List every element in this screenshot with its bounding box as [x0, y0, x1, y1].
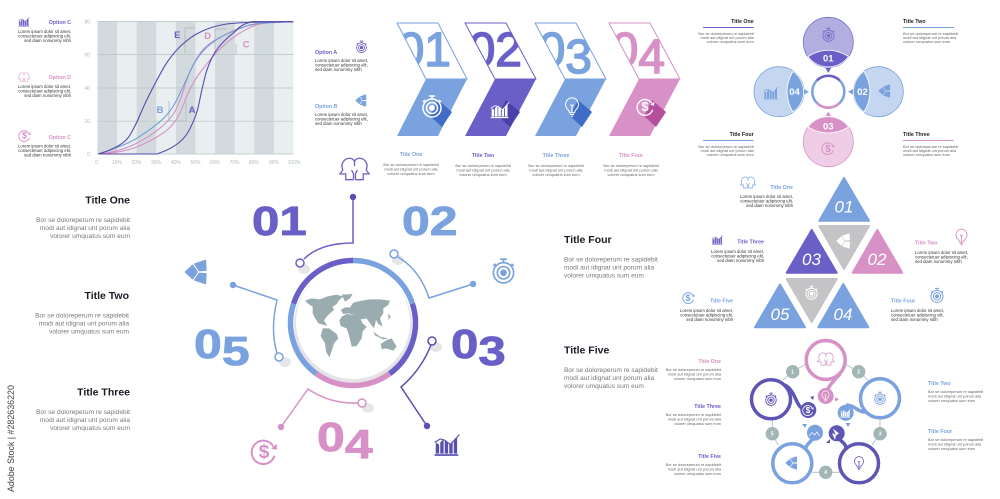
stock stamp: Adobe Stock | #282636220	[6, 385, 16, 492]
right text blocks: volorer umquatus sum eum	[564, 383, 644, 390]
circle 01	[803, 17, 853, 73]
right labels: Title Two	[928, 381, 951, 387]
chevron 01: Title One	[400, 152, 422, 158]
x axis labels: 80%	[249, 160, 260, 166]
right labels: volorer umquatus sum eum	[928, 398, 975, 403]
title three: consectetuer adipiscing elit,	[711, 254, 764, 258]
chevron 02	[455, 23, 536, 177]
title five: Title Five	[710, 298, 733, 304]
chevron 03	[528, 23, 606, 177]
y axis labels: 20	[84, 119, 90, 125]
left text blocks: Bor se doloreperum re sapidebit	[36, 409, 130, 416]
chevron 02: Bor se doloreperum re sapidebit	[455, 163, 512, 168]
option C dollar: consectetuer adipiscing elit,	[18, 148, 71, 153]
connector 04	[278, 389, 374, 430]
title three: modi aut idignat unt porum alia	[903, 148, 957, 153]
chart plot: C	[243, 40, 250, 50]
icon: heads	[340, 158, 369, 180]
option A: Lorem ipsum dolor sit amet,	[315, 58, 368, 63]
triangle numbers: 03	[802, 250, 821, 269]
big numbers: 01	[252, 198, 307, 244]
panel: S-curve chart	[18, 17, 301, 166]
world map	[305, 294, 397, 357]
left text blocks: Bor se doloreperum re sapidebit	[35, 312, 129, 320]
title three	[903, 132, 959, 157]
x axis labels: 70%	[229, 160, 240, 166]
right labels: Bor se doloreperum re sapidebit	[928, 389, 984, 394]
title four: Title Four	[891, 298, 915, 304]
left text blocks: modi aut idignat unt porum alia	[40, 417, 130, 424]
title three: Title Three	[903, 132, 930, 138]
option C dollar: Lorem ipsum dolor sit amet,	[18, 144, 71, 148]
big numbers: 0	[451, 321, 478, 367]
purple ring bottom	[826, 425, 878, 483]
option D: Option D	[49, 75, 71, 81]
triangle numbers: 02	[868, 250, 887, 269]
number dots: 3	[879, 432, 882, 438]
panel: triangle pyramid	[680, 177, 968, 327]
panel: four circles	[698, 17, 959, 167]
title one	[698, 19, 755, 44]
circle 03: $	[825, 144, 831, 155]
x axis labels: 0	[95, 160, 98, 166]
title three: volorer umquatus sum eum	[903, 152, 950, 157]
option B: Lorem ipsum dolor sit amet,	[315, 112, 368, 117]
option B	[315, 95, 368, 126]
title four: sed diam nonummy nibh	[891, 317, 938, 322]
title one: sed diam nonummy nibh	[746, 203, 794, 208]
purple ring left: $	[806, 406, 811, 415]
left text blocks: Title Two	[84, 290, 129, 302]
right text blocks: Title Five	[564, 344, 609, 356]
left labels: Title One	[698, 359, 721, 365]
option A: sed diam nonummy nibh	[315, 67, 362, 72]
chevron 03: 0	[539, 24, 565, 77]
left labels: Title Five	[698, 454, 721, 460]
option B: sed diam nonummy nibh	[315, 121, 362, 126]
title three	[711, 235, 765, 263]
circle 01: 01	[823, 54, 834, 64]
chevron 03: 3	[565, 31, 592, 84]
right text blocks	[564, 234, 658, 390]
title five	[680, 293, 734, 322]
y axis labels: 40	[84, 86, 90, 92]
title five: Lorem ipsum dolor sit amet,	[680, 308, 733, 313]
option A: consectetuer adipiscing elit,	[315, 62, 368, 68]
right labels	[928, 381, 984, 451]
triangle numbers: 04	[834, 305, 852, 324]
x axis labels: 40%	[171, 160, 182, 166]
chevron 02: Title Two	[472, 153, 495, 159]
x axis labels: 10%	[112, 160, 123, 166]
x axis labels: 100%	[288, 160, 301, 166]
left labels: volorer umquatus sum eum	[674, 376, 721, 381]
number dots	[766, 365, 887, 479]
left labels: modi aut idignat unt porum alia	[668, 372, 722, 376]
chevron 04: $	[641, 99, 649, 114]
title two: consectetuer adipiscing elit,	[915, 254, 968, 260]
left text blocks: modi aut idignat unt porum alia	[40, 225, 130, 232]
chevron 02: modi aut idignat unt porum alia	[456, 168, 510, 172]
right labels: volorer umquatus sum eum	[928, 446, 975, 451]
title two: Title Two	[915, 240, 938, 246]
title four: Bor se doloreperum re sapidebit	[698, 144, 755, 149]
pink ring	[806, 340, 845, 404]
right text blocks: modi aut idignat unt porum alia	[564, 375, 655, 382]
option C dollar: $	[22, 130, 27, 140]
title one: volorer umquatus sum eum	[707, 39, 754, 44]
chevron 04: Bor se doloreperum re sapidebit	[603, 163, 660, 168]
title five: consectetuer adipiscing elit,	[680, 312, 733, 318]
left text blocks: volorer umquatus sum eum	[50, 425, 130, 432]
left text blocks: volorer umquatus sum eum	[49, 328, 129, 336]
right text blocks: volorer umquatus sum eum	[564, 272, 644, 280]
x axis labels: 30%	[151, 160, 162, 166]
right labels: Title Four	[928, 429, 952, 435]
chevron 04	[603, 23, 680, 177]
title three: Title Three	[737, 240, 764, 246]
option C dollar: sed diam nonummy nibh	[24, 152, 72, 158]
title two: modi aut idignat unt porum alia	[903, 35, 957, 40]
title one: Title One	[731, 19, 754, 25]
chart plot: E	[174, 30, 180, 41]
option C chart: Lorem ipsum dolor sit amet,	[18, 29, 71, 34]
right text blocks: Bor se doloreperum re sapidebit	[564, 367, 658, 374]
title two: volorer umquatus sum eum	[903, 39, 950, 44]
blue ring	[838, 379, 900, 427]
y axis labels: 80	[84, 20, 90, 26]
chevron 01	[383, 23, 467, 176]
chevron 02: volorer umquatus sum eum	[459, 172, 507, 177]
left text blocks: modi aut idignat unt porum alia	[39, 320, 129, 328]
ring with map	[291, 260, 415, 386]
left labels: modi aut idignat unt porum alia	[668, 416, 722, 422]
chevron 03: volorer umquatus sum eum	[532, 172, 580, 177]
connector 03	[401, 337, 442, 429]
chevron 02: 02	[469, 24, 522, 77]
center ring	[812, 76, 844, 108]
title three: Bor se doloreperum re sapidebit	[903, 144, 959, 149]
title two	[915, 229, 968, 264]
left labels: Title Three	[694, 404, 721, 410]
left text blocks: Bor se doloreperum re sapidebit	[36, 217, 130, 224]
option A: Option A	[315, 50, 337, 56]
triangles	[755, 178, 902, 327]
right labels: modi aut idignat unt porum alia	[928, 394, 982, 398]
right text blocks: modi aut idignat unt porum alia	[564, 264, 655, 272]
title one: Lorem ipsum dolor sit amet,	[740, 194, 793, 199]
left labels: Bor se doloreperum re sapidebit	[666, 462, 722, 467]
connecting lines	[772, 364, 880, 472]
left labels: Bor se doloreperum re sapidebit	[666, 412, 722, 417]
chevron 04: modi aut idignat unt porum alia	[604, 168, 658, 172]
panel: pentagon cycle	[666, 340, 984, 483]
circle 02	[848, 67, 903, 117]
chevron 04: 4	[638, 31, 665, 84]
number dots: 4	[824, 470, 827, 476]
left labels: modi aut idignat unt porum alia	[668, 466, 722, 472]
triangle numbers: 01	[835, 198, 853, 216]
title four: Lorem ipsum dolor sit amet,	[891, 308, 944, 313]
left text blocks: Title One	[85, 194, 130, 206]
option D: consectetuer adipiscing elit,	[18, 88, 71, 94]
left text blocks: volorer umquatus sum eum	[50, 233, 130, 240]
left text blocks	[35, 194, 130, 432]
title one: modi aut idignat unt porum alia	[700, 35, 755, 40]
left labels	[666, 359, 722, 476]
option D: Lorem ipsum dolor sit amet,	[18, 84, 71, 89]
big numbers: 02	[402, 198, 458, 244]
big numbers: 3	[478, 328, 506, 374]
x axis labels: 20%	[131, 160, 142, 166]
triangle numbers: 05	[771, 305, 790, 324]
chevron 04: 0	[612, 24, 638, 77]
x axis labels: 90%	[269, 160, 280, 166]
icon: speech triangle	[185, 260, 206, 284]
x axis labels: 60%	[210, 160, 221, 166]
title one: Title One	[770, 185, 793, 191]
title one: consectetuer adipiscing elit,	[740, 198, 793, 204]
option B: Option B	[315, 104, 338, 110]
title two	[903, 19, 959, 44]
title four: modi aut idignat unt porum alia	[700, 148, 755, 153]
icon: chart	[435, 434, 459, 456]
option D: sed diam nonummy nibh	[24, 93, 72, 98]
connector 05	[230, 282, 291, 367]
right labels: modi aut idignat unt porum alia	[928, 442, 982, 446]
number dots: 5	[771, 432, 774, 438]
y axis labels: 0	[87, 152, 90, 158]
option C chart: Option C	[49, 20, 71, 26]
chevron 04: volorer umquatus sum eum	[607, 172, 655, 177]
left labels: volorer umquatus sum eum	[674, 471, 721, 476]
triangle numbers	[771, 198, 887, 324]
chart plot: B	[157, 105, 164, 116]
big numbers: 5	[222, 328, 250, 374]
title five: sed diam nonummy nibh	[686, 317, 734, 322]
right text blocks: Bor se doloreperum re sapidebit	[564, 256, 658, 264]
chevron 01: Bor se doloreperum re sapidebit	[383, 162, 440, 167]
chevron 01: 01	[398, 24, 451, 77]
x axis labels: 50%	[190, 160, 201, 166]
big numbers	[194, 198, 506, 467]
chart plot	[98, 22, 294, 154]
title four: Title Four	[730, 132, 754, 138]
option C chart	[18, 17, 72, 43]
circle 03: 03	[823, 122, 834, 132]
circle 04: 04	[789, 87, 800, 98]
option D	[18, 73, 72, 98]
left labels: Bor se doloreperum re sapidebit	[666, 367, 722, 372]
icon: dollar: $	[259, 442, 270, 463]
panel: world map cycle	[35, 158, 658, 467]
blue ring bottom	[773, 424, 823, 483]
left text blocks: Title Three	[77, 386, 130, 398]
option C dollar	[18, 130, 72, 158]
y axis labels: 60	[84, 52, 90, 58]
option C chart: sed diam nonummy nibh	[24, 38, 72, 43]
chart plot: D	[204, 31, 211, 42]
title one: Bor se doloreperum re sapidebit	[698, 31, 755, 36]
title five: $	[685, 293, 691, 303]
chevron 01: volorer umquatus sum eum	[387, 171, 435, 176]
title four: volorer umquatus sum eum	[707, 152, 754, 157]
title four: consectetuer adipiscing elit,	[891, 312, 944, 318]
circle 04	[754, 67, 809, 117]
grey triangle icons	[806, 234, 850, 299]
icon: dollar	[252, 441, 277, 464]
purple ring left	[752, 380, 816, 419]
circle 03	[803, 112, 853, 167]
title three: sed diam nonummy nibh	[717, 258, 765, 263]
right labels: Bor se doloreperum re sapidebit	[928, 437, 984, 442]
title three: Lorem ipsum dolor sit amet,	[711, 249, 764, 254]
option C chart: consectetuer adipiscing elit,	[18, 34, 71, 38]
panel: chevron process	[315, 23, 680, 177]
option B: consectetuer adipiscing elit,	[315, 116, 368, 122]
x axis labels	[95, 160, 301, 166]
title two: Lorem ipsum dolor sit amet,	[915, 250, 968, 255]
number dots: 1	[791, 370, 794, 376]
chevron 03: modi aut idignat unt porum alia	[529, 168, 583, 172]
title two: sed diam nonummy nibh	[915, 259, 962, 264]
y axis labels	[84, 20, 90, 158]
title four	[698, 132, 755, 157]
connector 02	[390, 250, 476, 298]
chevron 01: modi aut idignat unt porum alia	[384, 166, 438, 172]
connector 01	[296, 194, 356, 274]
chevron 03: Title Three	[543, 153, 569, 159]
icon: stopwatch	[493, 259, 514, 283]
big numbers: 0	[194, 321, 222, 367]
option C dollar: Option C	[49, 135, 71, 141]
right text blocks: Title Four	[564, 234, 612, 246]
option A	[315, 41, 368, 72]
title one	[740, 177, 794, 208]
title two: Bor se doloreperum re sapidebit	[903, 31, 959, 36]
title two: Title Two	[903, 19, 926, 25]
left labels: volorer umquatus sum eum	[674, 421, 721, 426]
chart plot: A	[189, 105, 196, 116]
circle 02: 02	[857, 87, 868, 98]
chevron 03: Bor se doloreperum re sapidebit	[528, 163, 585, 168]
big numbers: 0	[317, 414, 345, 460]
number dots: 2	[857, 370, 860, 376]
chevron 04: Title Four	[619, 153, 643, 159]
title four	[891, 288, 944, 322]
big numbers: 4	[345, 421, 373, 467]
